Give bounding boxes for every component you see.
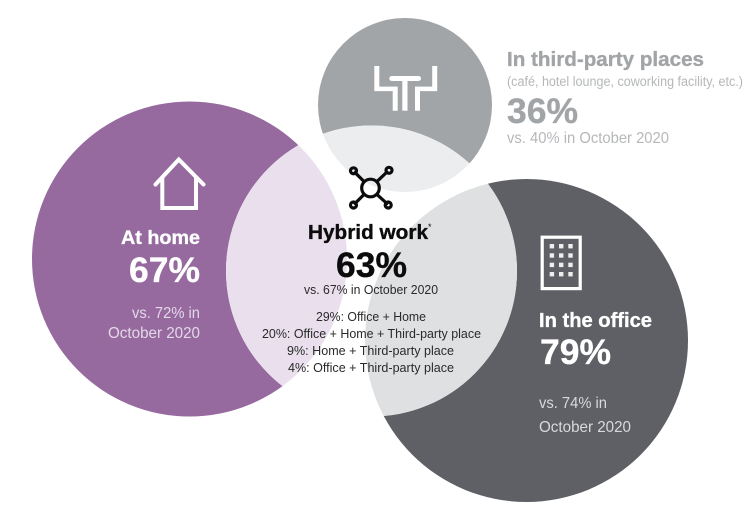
breakdown list: 4%: Office + Third-party place [288,360,454,375]
heading: third-party places: In third-party places [507,49,704,71]
heading: hybrid work: Hybrid work [308,222,429,244]
comparison: at home: October 2020 [108,325,200,342]
icon: hybrid network [350,167,392,208]
heading: at home: At home [121,227,200,249]
panel: office circle [365,179,688,502]
number: 63%: 63% [336,246,407,285]
text: third-party places [507,49,743,147]
breakdown list [262,309,481,375]
comparison: at home [108,305,200,342]
heading: in the office: In the office [539,310,652,332]
comparison: office: vs. 74% in [539,395,607,412]
breakdown list: 9%: Home + Third-party place [287,343,454,358]
icon: office building [542,237,580,289]
comparison: third-party: vs. 40% in October 2020 [507,130,669,147]
comparison: office: October 2020 [539,419,631,436]
comparison: office [539,395,631,436]
footnote asterisk: * [428,222,432,232]
icon: house [156,160,204,208]
icon: table and chairs [374,66,437,111]
text: in the office [539,310,652,436]
breakdown list: 20%: Office + Home + Third-party place [262,326,481,341]
text: at home [108,227,200,342]
breakdown list: 29%: Office + Home [316,309,426,324]
number: 79%: 79% [540,333,611,372]
number: 36%: 36% [507,92,578,131]
comparison: at home: vs. 72% in [132,305,200,322]
text: hybrid work [262,222,481,375]
panel: hybrid work circle [226,126,517,416]
panel: third-party circle [318,18,492,192]
panel: at home circle [32,102,347,416]
number: 67%: 67% [129,251,200,290]
comparison: hybrid: vs. 67% in October 2020 [304,282,438,297]
